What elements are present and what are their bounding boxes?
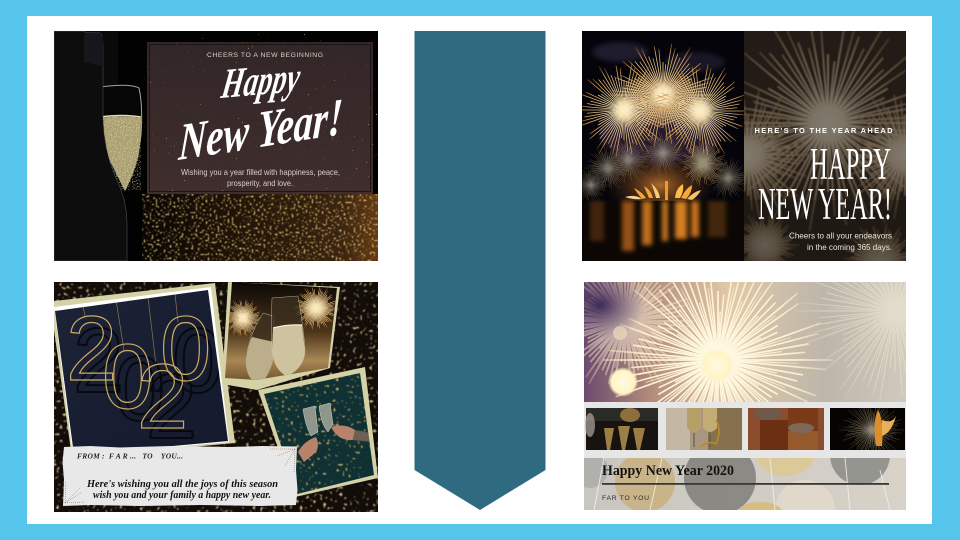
photo frame: flutes and fireworks <box>222 282 340 390</box>
number shadow <box>76 326 220 439</box>
message box <box>147 42 373 194</box>
number shadow: 0 <box>172 310 223 412</box>
text: card subtitle: FAR TO YOU <box>602 495 649 502</box>
bottle shadow strip <box>54 31 118 261</box>
spark decoration <box>65 449 295 503</box>
text: cheers heading: CHEERS TO A NEW BEGINNING <box>207 52 323 59</box>
balloon background <box>572 425 906 540</box>
number shadow: 0 <box>114 338 165 440</box>
ribbon banner <box>414 31 546 510</box>
text: HAPPY: HAPPY <box>810 139 891 189</box>
text: card title: Happy New Year 2020 <box>602 463 734 479</box>
thumbnail: gift boxes <box>748 408 824 450</box>
thumbnail: dark firework <box>830 399 905 461</box>
number 2020 in gold outline: 2 <box>137 346 188 448</box>
icon: champagne bottle <box>54 31 127 261</box>
number 2020 in gold outline: 0 <box>160 298 211 400</box>
number shadow: 2 <box>146 356 197 458</box>
note paper <box>62 446 298 506</box>
smoke and glow <box>592 42 725 219</box>
bokeh orbs <box>608 326 733 396</box>
text: wish message: Here's wishing you all the joys of this season <box>86 479 278 490</box>
left photo: fireworks over water <box>573 31 750 261</box>
text: from line: FROM : F A R ... TO YOU... <box>77 452 183 460</box>
divider rule <box>602 483 889 485</box>
text: wishes: prosperity, and love. <box>227 179 293 188</box>
number 2020 in gold outline: 0 <box>102 326 153 428</box>
text: wishes: Wishing you a year filled with happiness, peace, <box>181 168 340 177</box>
panel: 2020 collage card <box>54 282 378 512</box>
text: Happy script: Happy <box>218 54 304 108</box>
small bursts <box>223 286 339 337</box>
text: cheers message: Cheers to all your endeavors <box>789 230 892 240</box>
glitter background <box>54 282 378 512</box>
text: cheers message: in the coming 365 days. <box>807 242 892 252</box>
icon: champagne flute <box>100 85 142 190</box>
card background <box>118 31 378 261</box>
panel: cheers card <box>54 31 378 261</box>
photo frame: toast <box>258 367 378 497</box>
left flute <box>246 313 275 383</box>
number 2020 in gold outline: 2 <box>66 298 117 400</box>
text: New Year script: New Year! <box>177 88 344 172</box>
photo frame: 2020 ornaments <box>54 283 235 458</box>
glitter field <box>142 31 378 196</box>
panel: photo strip card <box>551 214 960 540</box>
number 2020 in gold outline <box>70 315 208 429</box>
hero fireworks photo <box>551 214 960 472</box>
thumbnail: flutes with ribbon <box>666 408 742 450</box>
water reflections <box>586 198 730 256</box>
gold glitter band <box>142 194 378 261</box>
text: wish message: wish you and your family a happy new year. <box>93 490 271 501</box>
thumbnail: champagne party <box>585 408 658 450</box>
right photo: blurred fireworks <box>744 31 906 261</box>
gold bokeh <box>264 373 373 493</box>
card background <box>584 282 906 510</box>
low flames <box>625 181 701 200</box>
firework bursts <box>573 43 750 202</box>
hanging strings <box>83 294 178 365</box>
number shadow: 2 <box>73 310 124 412</box>
clinking glasses <box>303 403 333 436</box>
text: year ahead: HERE'S TO THE YEAR AHEAD <box>754 126 893 135</box>
panel: fireworks card <box>582 31 906 261</box>
right flute <box>272 296 305 383</box>
hands <box>298 426 375 462</box>
